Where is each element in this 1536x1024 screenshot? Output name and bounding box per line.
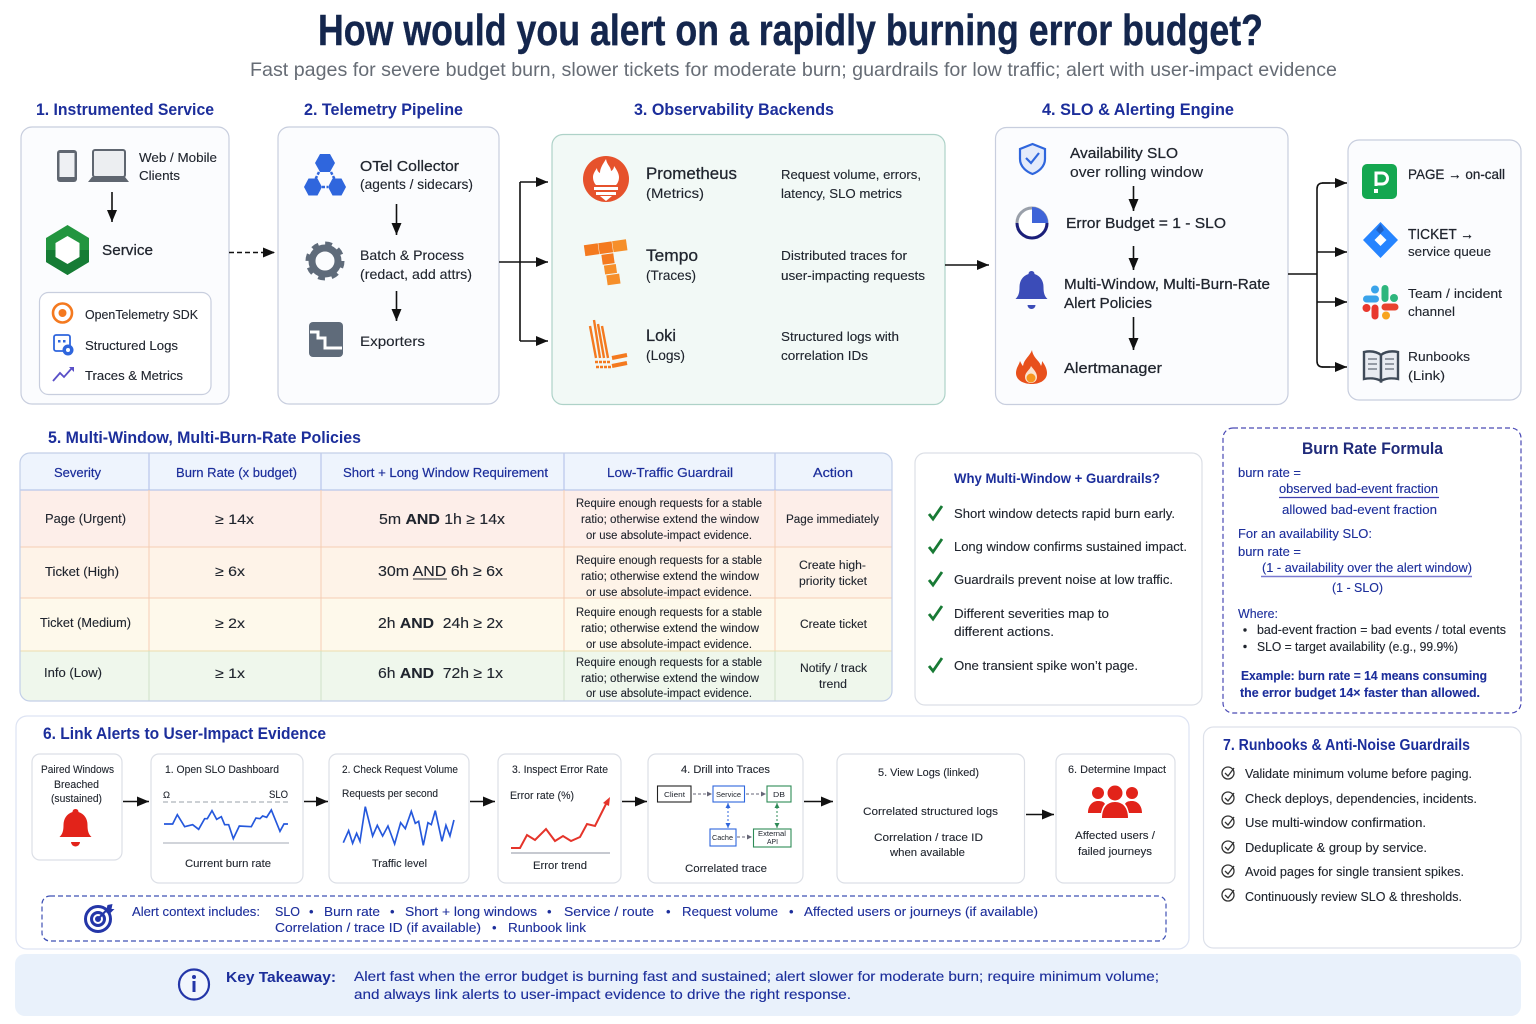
card: open slo dashboard	[151, 754, 303, 883]
label: otel collector: (agents / sidecars)	[360, 176, 473, 192]
text: alert context items	[132, 904, 1038, 935]
label: alert policies	[1064, 276, 1270, 312]
text: alert context items: •	[309, 904, 314, 919]
row: info low: Info (Low)	[44, 665, 102, 680]
diagram: trace topology: Service	[716, 790, 741, 799]
icon: book	[1364, 351, 1398, 381]
text: tempo description: Distributed traces for	[781, 248, 908, 263]
row: ticket medium	[40, 607, 868, 651]
label: loki	[646, 327, 685, 363]
formula: burn rate: burn rate =	[1238, 465, 1301, 480]
row: info low: trend	[819, 679, 847, 691]
row: page urgent: ratio; otherwise extend the window	[581, 514, 760, 526]
label: runbooks link: (Link)	[1408, 368, 1445, 383]
icon: otel collector	[304, 154, 346, 196]
row: ticket high: Create high-	[799, 560, 866, 572]
label: runbooks link	[1408, 349, 1471, 383]
card: check request volume: 2. Check Request Volume	[342, 764, 458, 776]
list: check items	[929, 506, 1187, 673]
heading: 3. Observability Backends: 3. Observability Backends	[634, 101, 834, 119]
label: otel collector	[360, 158, 473, 192]
row: page urgent	[45, 498, 879, 542]
label: ticket service queue: TICKET →	[1408, 226, 1474, 243]
icon: phone	[57, 150, 77, 182]
text: takeaway message: Alert fast when the error budget is burning fast and sustained; alert slower for moderate burn; require minimum volume;	[354, 968, 1159, 984]
card: view logs: when available	[889, 847, 965, 859]
card: view logs: Correlation / trace ID	[874, 832, 983, 844]
card: inspect error rate	[498, 754, 621, 883]
icon: ticket diamond	[1363, 222, 1398, 258]
row: ticket high: priority ticket	[799, 576, 868, 588]
arrow: error rate to traces	[622, 800, 647, 802]
list: check items: different actions.	[954, 624, 1054, 639]
icon: shield	[1020, 144, 1045, 174]
arrow: slo to error budget	[1132, 186, 1134, 211]
card: inspect error rate: Error rate (%)	[510, 790, 574, 802]
card: inspect error rate: Error trend	[533, 860, 587, 872]
card: paired windows breached: (sustained)	[51, 793, 102, 805]
row: ticket high: 30m AND 6h ≥ 6x	[378, 563, 504, 580]
table: burn rate policies	[20, 453, 892, 701]
text: alert context items: Correlation / trace ID (if available)	[275, 920, 481, 935]
label: otel collector: OTel Collector	[360, 158, 459, 175]
row: ticket high	[45, 555, 868, 599]
card: determine impact: failed journeys	[1078, 846, 1153, 858]
heading: 2. Telemetry Pipeline: 2. Telemetry Pipeline	[304, 101, 463, 119]
label: loki: (Logs)	[646, 347, 685, 363]
label: team incident channel: Team / incident	[1408, 286, 1502, 301]
icon: structured logs	[54, 335, 74, 356]
text: alert context items: Short + long windows	[405, 904, 538, 919]
text: prometheus description: Request volume, errors,	[781, 167, 921, 182]
list: check items: Different severities map to	[954, 606, 1109, 621]
arrow: backends to engine	[945, 264, 989, 266]
label: team incident channel: channel	[1408, 304, 1455, 319]
heading: 4. SLO & Alerting Engine: 4. SLO & Alerting Engine	[1042, 101, 1234, 119]
row: info low: Require enough requests for a stable	[576, 657, 762, 669]
heading: 6. link alerts: 6. Link Alerts to User-Impact Evidence	[43, 725, 326, 743]
text: where definitions: SLO = target availability (e.g., 99.9%)	[1257, 640, 1458, 654]
text: alert context items: Affected users or journeys (if available)	[804, 904, 1038, 919]
icon: chat channel	[1362, 285, 1398, 320]
text: alert context items: Alert context includes:	[132, 904, 260, 919]
text: loki description: Structured logs with	[781, 329, 899, 344]
label: alertmanager: Alertmanager	[1064, 360, 1162, 377]
heading: 1. Instrumented Service: 1. Instrumented Service	[36, 101, 214, 119]
row: ticket medium: Create ticket	[800, 619, 868, 631]
text: prometheus description	[781, 167, 921, 201]
label: page on-call: PAGE → on-call	[1408, 166, 1505, 182]
arrow: service to pipeline (dashed)	[229, 252, 275, 254]
icon: prometheus	[583, 156, 629, 202]
diagram: trace topology: External	[758, 831, 786, 838]
row: page urgent: Page (Urgent)	[45, 511, 126, 526]
text: takeaway message	[354, 968, 1159, 1002]
text: where definitions: bad-event fraction = bad events / total events	[1257, 623, 1506, 637]
chart: burn rate line	[163, 810, 289, 843]
list: check items: Guardrails prevent noise at low traffic.	[954, 572, 1173, 587]
label: tempo: (Traces)	[646, 267, 696, 283]
panel: burn rate formula	[1223, 428, 1521, 713]
list: check items: Short window detects rapid burn early.	[954, 506, 1175, 521]
diagram: trace topology: DB	[773, 790, 785, 799]
text: alert context items: Service / route	[564, 904, 654, 919]
card: paired windows breached: Paired Windows	[41, 764, 114, 776]
icon: laptop	[88, 150, 129, 182]
card: check request volume	[329, 754, 469, 883]
arrows: pipeline to backends	[499, 182, 548, 341]
row: info low: or use absolute-impact evidence.	[586, 688, 752, 700]
text: alert context items: •	[789, 904, 794, 919]
arrow: batch to exporters	[396, 291, 398, 321]
row: ticket high: or use absolute-impact evidence.	[586, 587, 752, 599]
text: where definitions: Where:	[1238, 606, 1278, 621]
icon: exporters	[309, 322, 343, 357]
row: info low: ≥ 1x	[215, 665, 245, 681]
row: info low: ratio; otherwise extend the window	[581, 673, 760, 685]
row: ticket medium: Ticket (Medium)	[40, 615, 131, 630]
text: worked example: the error budget 14× faster than allowed.	[1240, 685, 1480, 700]
card: determine impact	[1056, 754, 1175, 883]
icon: loki	[590, 320, 627, 367]
panel: observability backends	[552, 134, 945, 404]
label: web / mobile clients: Clients	[139, 168, 181, 183]
label: prometheus: Prometheus	[646, 165, 737, 183]
card: check request volume: Traffic level	[372, 858, 427, 870]
row: page urgent: Require enough requests for a stable	[576, 498, 762, 510]
list: check items: One transient spike won’t page.	[954, 658, 1138, 673]
heading: 7. runbooks: 7. Runbooks & Anti-Noise Guardrails	[1223, 737, 1470, 754]
text: prometheus description: latency, SLO metrics	[781, 186, 903, 201]
arrow: policies to alertmanager	[1132, 317, 1134, 350]
list: guardrail items	[1222, 767, 1477, 904]
row: page urgent: 5m AND 1h ≥ 14x	[379, 511, 506, 528]
diagram: trace topology	[658, 786, 791, 847]
text: where definitions	[1238, 606, 1506, 654]
table header: Burn Rate (x budget)	[176, 465, 297, 480]
heading: 5. policies: 5. Multi-Window, Multi-Burn-Rate Policies	[48, 429, 361, 447]
label: traces and metrics: Traces & Metrics	[85, 368, 184, 383]
text: alert context items: •	[390, 904, 395, 919]
card: inspect error rate: 3. Inspect Error Rate	[512, 764, 608, 776]
table header: Severity	[54, 465, 101, 480]
label: prometheus	[646, 165, 737, 201]
chart: traffic line	[343, 807, 454, 845]
icon: affected users	[1088, 786, 1142, 818]
card: open slo dashboard: 1. Open SLO Dashboard	[165, 764, 279, 776]
card: open slo dashboard: Ω	[163, 790, 170, 800]
row: ticket medium: Require enough requests for a stable	[576, 607, 762, 619]
arrow: volume to error rate	[470, 800, 495, 802]
text: alert context items: Burn rate	[324, 904, 380, 919]
arrow: clients to service	[111, 192, 113, 222]
text: takeaway message: and always link alerts to user-impact evidence to drive the right response.	[354, 986, 851, 1002]
label: runbooks link: Runbooks	[1408, 349, 1471, 364]
formula: availability slo: (1 - availability over the alert window)	[1262, 560, 1472, 575]
row: info low: Notify / track	[800, 663, 867, 675]
text: worked example	[1240, 668, 1487, 700]
label: team incident channel	[1408, 286, 1502, 319]
list: guardrail items: Continuously review SLO & thresholds.	[1245, 890, 1462, 904]
card: determine impact: 6. Determine Impact	[1068, 764, 1166, 776]
diagram: trace topology: Client	[664, 790, 686, 799]
row: ticket high: Ticket (High)	[45, 564, 119, 579]
text: loki description: correlation IDs	[781, 348, 869, 363]
label: ticket service queue	[1408, 226, 1491, 259]
label: alert policies: Alert Policies	[1064, 295, 1152, 312]
formula: availability slo: For an availability SLO:	[1238, 526, 1372, 541]
label: opentelemetry sdk: OpenTelemetry SDK	[85, 307, 198, 322]
sub-panel: instrumentation	[40, 292, 211, 394]
table header: Action	[813, 465, 853, 480]
card: drill into traces	[648, 754, 803, 883]
card: drill into traces: Correlated trace	[685, 863, 767, 875]
panel: link alerts to user-impact evidence	[16, 716, 1189, 949]
label: tempo	[646, 247, 698, 283]
label: alert policies: Multi-Window, Multi-Burn-Rate	[1064, 276, 1270, 293]
card: check request volume: Requests per second	[342, 788, 438, 800]
icon: red bell	[60, 809, 92, 846]
list: guardrail items: Use multi-window confirmation.	[1245, 816, 1426, 830]
card: open slo dashboard: SLO	[269, 789, 288, 801]
list: check items: Long window confirms sustained impact.	[954, 539, 1187, 554]
formula: availability slo	[1238, 526, 1472, 595]
icon: tempo	[584, 239, 632, 288]
label: exporters: Exporters	[360, 333, 425, 349]
callout: alert context	[42, 896, 1166, 941]
table header	[54, 465, 853, 480]
panel: runbooks and anti-noise guardrails	[1204, 727, 1521, 948]
icon: gear	[308, 244, 342, 278]
label: batch and process	[360, 247, 472, 282]
icon: service hexagon	[46, 225, 89, 275]
label: batch and process: Batch & Process	[360, 247, 464, 263]
card: paired windows breached	[32, 754, 122, 860]
label: web / mobile clients: Web / Mobile	[139, 150, 217, 165]
row: ticket high: ≥ 6x	[215, 563, 245, 579]
label: loki: Loki	[646, 327, 676, 345]
panel: why multi-window + guardrails	[915, 453, 1202, 705]
formula: availability slo: (1 - SLO)	[1332, 580, 1383, 595]
label: ticket service queue: service queue	[1408, 244, 1491, 259]
heading: burn rate formula: Burn Rate Formula	[1302, 440, 1444, 458]
text: tempo description	[781, 248, 926, 283]
arrow: logs to impact	[1026, 814, 1054, 816]
label: tempo: Tempo	[646, 247, 698, 265]
diagram: trace topology: API	[767, 839, 778, 846]
text: loki description	[781, 329, 899, 363]
list: guardrail items: Avoid pages for single transient spikes.	[1245, 865, 1464, 879]
icon: blue bell	[1016, 271, 1048, 309]
row: page urgent: ≥ 14x	[215, 511, 254, 527]
row: ticket high: ratio; otherwise extend the window	[581, 571, 760, 583]
formula: burn rate	[1238, 465, 1439, 517]
label: availability slo: over rolling window	[1070, 165, 1204, 181]
text: alert context items: •	[492, 920, 497, 935]
text: alert context items: Runbook link	[508, 920, 587, 935]
text: alert context items: SLO	[275, 904, 300, 919]
label: service: Service	[102, 242, 153, 259]
panel: instrumented service	[21, 127, 229, 404]
icon: pager	[1362, 164, 1397, 199]
row: page urgent: or use absolute-impact evidence.	[586, 530, 752, 542]
formula: availability slo: burn rate =	[1238, 544, 1301, 559]
icon: opentelemetry sdk	[53, 304, 72, 322]
icon: error budget pie	[1017, 207, 1048, 238]
title: How would you alert on a rapidly burning error budget?	[318, 6, 1263, 55]
table header: Low-Traffic Guardrail	[607, 465, 733, 480]
formula: burn rate: allowed bad-event fraction	[1282, 502, 1437, 517]
banner: key takeaway	[15, 954, 1521, 1016]
label: availability slo: Availability SLO	[1070, 145, 1178, 162]
card: paired windows breached: Breached	[54, 779, 99, 791]
panel: slo and alerting engine	[996, 128, 1288, 404]
row: info low: 6h AND 72h ≥ 1x	[378, 665, 504, 682]
icon: info	[179, 970, 209, 1000]
arrow: error budget to policies	[1132, 246, 1134, 270]
arrow: traces to logs	[804, 800, 833, 802]
row: ticket medium: 2h AND 24h ≥ 2x	[378, 615, 504, 632]
panel: telemetry pipeline	[278, 127, 499, 404]
text: alert context items: •	[547, 904, 552, 919]
row: info low	[44, 657, 867, 700]
card: view logs	[837, 754, 1024, 883]
text: worked example: Example: burn rate = 14 means consuming	[1241, 668, 1487, 683]
subtitle: Fast pages for severe budget burn, slower tickets for moderate burn; guardrails for low traffic; alert with user-impact evidence	[250, 59, 1337, 81]
label: availability slo	[1070, 145, 1204, 181]
list: guardrail items: Check deploys, dependencies, incidents.	[1245, 792, 1477, 806]
list: guardrail items: Deduplicate & group by service.	[1245, 841, 1427, 855]
table header: Short + Long Window Requirement	[343, 465, 548, 480]
card: open slo dashboard: Current burn rate	[185, 858, 271, 870]
label: structured logs: Structured Logs	[85, 338, 178, 353]
heading: why multi-window: Why Multi-Window + Guardrails?	[954, 471, 1160, 486]
row: ticket medium: ratio; otherwise extend the window	[581, 623, 760, 635]
row: ticket medium: or use absolute-impact evidence.	[586, 639, 752, 651]
icon: target	[86, 904, 114, 932]
arrows: engine to destinations	[1288, 183, 1347, 367]
formula: burn rate: observed bad-event fraction	[1279, 481, 1438, 496]
arrow: dashboard to volume	[304, 800, 328, 802]
label: prometheus: (Metrics)	[646, 185, 704, 201]
icon: traces and metrics	[53, 367, 74, 381]
chart: error trend line	[511, 797, 610, 853]
card: drill into traces: 4. Drill into Traces	[681, 764, 771, 776]
icon: flame	[1016, 350, 1047, 384]
card: view logs: 5. View Logs (linked)	[878, 767, 979, 779]
card: view logs: Correlated structured logs	[863, 806, 999, 818]
label: batch and process: (redact, add attrs)	[360, 266, 472, 282]
diagram: trace topology: Cache	[712, 833, 733, 842]
label: error budget: Error Budget = 1 - SLO	[1066, 215, 1226, 232]
label: key takeaway: Key Takeaway:	[226, 969, 336, 986]
text: alert context items: •	[666, 904, 671, 919]
arrow: breached to dashboard	[123, 800, 149, 802]
list: guardrail items: Validate minimum volume before paging.	[1245, 767, 1472, 781]
label: web / mobile clients	[139, 150, 217, 183]
text: tempo description: user-impacting requests	[781, 268, 926, 283]
text: alert context items: Request volume	[682, 904, 778, 919]
row: ticket medium: ≥ 2x	[215, 615, 245, 631]
row: ticket high: Require enough requests for a stable	[576, 555, 762, 567]
panel: notification destinations	[1348, 140, 1521, 400]
card: determine impact: Affected users /	[1075, 830, 1156, 842]
row: page urgent: Page immediately	[786, 514, 879, 526]
arrow: collector to batch	[396, 204, 398, 235]
